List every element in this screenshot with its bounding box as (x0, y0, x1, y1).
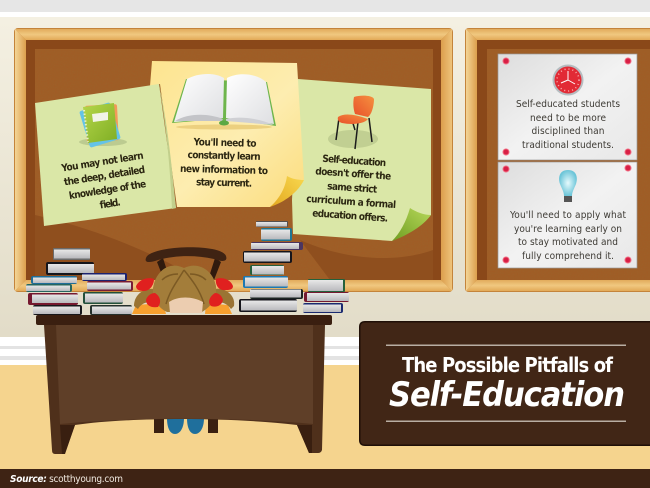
panel text: to stay motivated and (518, 237, 618, 248)
note text: curriculum a formal (306, 194, 396, 211)
pins (503, 58, 631, 155)
wall (0, 17, 650, 337)
note text (180, 137, 268, 190)
desk (36, 315, 332, 454)
panel text: disciplined than (532, 126, 604, 137)
panel text: fully comprehend it. (522, 251, 614, 262)
note: green right (292, 79, 431, 241)
source credit: Source: scotthyoung.com (10, 474, 123, 485)
panel: apply early (498, 162, 637, 268)
crossed arms (169, 298, 203, 313)
floor (0, 365, 650, 469)
note text: constantly learn (187, 150, 261, 163)
panel text: you're learning early on (514, 224, 622, 235)
top band (0, 0, 650, 12)
note text (306, 154, 396, 225)
footer (0, 469, 650, 488)
icon: open book (172, 74, 276, 130)
stack four (303, 279, 349, 313)
bows (136, 278, 233, 307)
note text: stay current. (196, 177, 252, 190)
note text: You may not learn (60, 151, 144, 175)
icon: clock (552, 64, 584, 96)
heading emphasis: Self-Education (389, 375, 625, 415)
baseboard (0, 337, 650, 365)
panel text (509, 210, 626, 262)
page curl (270, 176, 304, 207)
note text: field. (99, 197, 121, 212)
feet under desk (154, 418, 218, 434)
note text: education offers. (312, 208, 388, 225)
panel text: You'll need to apply what (509, 210, 626, 221)
panel text: Self-educated students (516, 99, 620, 110)
note text: same strict (327, 181, 378, 196)
heading: The Possible Pitfalls of (402, 353, 613, 377)
icon: chair (328, 96, 378, 149)
icon: notebooks (79, 102, 127, 148)
note text: You'll need to (192, 137, 257, 150)
note text: doesn't offer the (315, 166, 391, 183)
book stacks (26, 221, 349, 315)
panel text: traditional students. (522, 140, 614, 151)
right corkboard (465, 28, 650, 292)
left corkboard (14, 28, 453, 292)
note text: knowledge of the (68, 179, 147, 202)
note text: new information to (180, 164, 268, 177)
panel text: need to be more (530, 113, 606, 124)
note: green left (35, 84, 176, 226)
icon: light bulb (559, 170, 577, 202)
sweater arms (132, 303, 232, 314)
note text (60, 151, 147, 212)
stack one (26, 248, 94, 315)
stack two (82, 273, 133, 315)
page curl (392, 208, 431, 241)
hair (153, 266, 216, 312)
chair back (146, 247, 226, 280)
note: yellow centre (150, 61, 304, 207)
pigtails (134, 289, 234, 309)
note text: Self-education (322, 154, 386, 169)
girl (132, 266, 234, 314)
panel: disciplined (498, 54, 637, 160)
panel text (516, 99, 620, 151)
note text: the deep, detailed (63, 165, 146, 188)
title panel (359, 321, 650, 446)
pins (503, 165, 631, 263)
stack three (239, 221, 303, 312)
